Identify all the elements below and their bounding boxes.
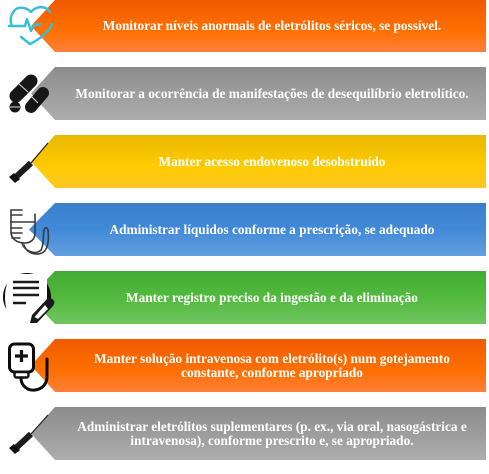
panel: continuous IV solution: Manter solução intravenosa com eletrólito(s) num gotejamento (94, 351, 450, 366)
panel: supplemental electrolytes: intravenosa), conforme prescrito e, se apropriado. (130, 433, 414, 448)
icon: document with pencil (3, 273, 54, 323)
icon: IV bag and tube (11, 210, 48, 254)
panel: administer fluids: Administrar líquidos conforme a prescrição, se adequado (110, 222, 435, 237)
icon: syringe needle (9, 143, 48, 183)
panel: intake and output record (29, 271, 486, 324)
panel: continuous IV solution (31, 339, 486, 392)
panel: monitor imbalance signs (31, 67, 486, 120)
panel: monitor serum levels (31, 0, 486, 52)
icon: supplement syringe (9, 415, 48, 454)
icon: pills (10, 81, 43, 112)
panel: monitor imbalance signs: Monitorar a ocorrência de manifestações de desequilíbrio eletrolítico. (75, 86, 469, 101)
panel: intake and output record: Manter registro preciso da ingestão e da eliminação (126, 290, 418, 305)
panel: keep IV access: Manter acesso endovenoso desobstruído (159, 154, 386, 169)
panel: keep IV access (31, 135, 486, 188)
panel: administer fluids (29, 203, 486, 256)
icon: heart with pulse (9, 7, 52, 44)
icon: infusion pump bag (10, 344, 47, 390)
panel: supplemental electrolytes: Administrar eletrólitos suplementares (p. ex., via oral, nasogástrica e (77, 419, 467, 434)
panel: continuous IV solution: constante, conforme apropriado (181, 365, 363, 380)
small blue marker (241, 0, 248, 3)
panel: supplemental electrolytes (31, 407, 486, 460)
panel: monitor serum levels: Monitorar níveis anormais de eletrólitos séricos, se possível. (103, 18, 441, 33)
